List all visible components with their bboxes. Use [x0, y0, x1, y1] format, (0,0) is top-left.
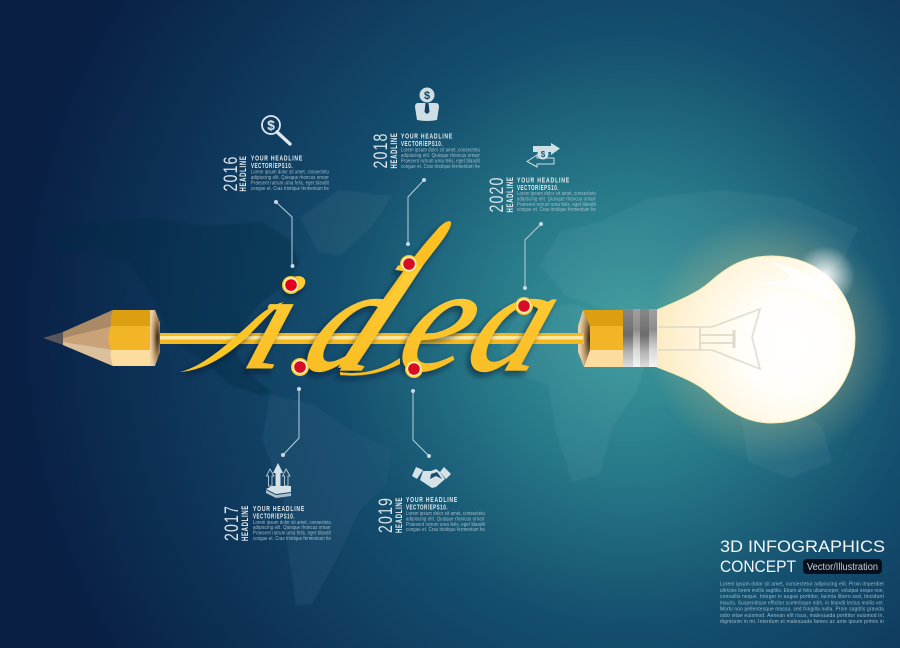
body text: adipiscing elit. Quisque rhoncus ornarr [401, 153, 480, 159]
title line 2: CONCEPT [720, 557, 796, 576]
block 2020 [487, 176, 596, 213]
icon: money with rising arrows [266, 463, 291, 498]
connector 2017 [281, 387, 301, 457]
connector 2019 [411, 389, 431, 458]
letter d: d [280, 238, 436, 403]
subhead: VECTOR/EPS10. [251, 163, 293, 170]
block 2016 [221, 154, 329, 192]
letter a: a [449, 236, 585, 403]
cut face [150, 310, 160, 366]
year: 2018 [371, 132, 392, 168]
world map [42, 190, 858, 606]
body text: Praesent rutrum urna felis, eget blandit [406, 522, 485, 528]
block 2018 [371, 132, 480, 170]
headline: YOUR HEADLINE [251, 154, 303, 162]
icon: exchange arrows with dollar [527, 143, 560, 167]
year: 2016 [221, 156, 242, 192]
body text: Praesent rutrum urna felis, eget blandit [253, 530, 331, 536]
body text: congue et. Cras tristique fermentum he [406, 527, 485, 533]
side label: HEADLINE [505, 176, 515, 212]
body text: congue et. Cras tristique fermentum he [251, 186, 329, 192]
script word idea [180, 221, 585, 403]
side label: HEADLINE [238, 156, 248, 192]
title line 1: 3D INFOGRAPHICS [720, 537, 885, 556]
body text: Praesent rutrum urna felis, eget blandit [251, 180, 329, 186]
icon: magnifier with dollar [262, 116, 290, 144]
timeline marker 1 [282, 276, 300, 294]
bulb glass [657, 256, 855, 423]
headline: YOUR HEADLINE [401, 132, 453, 140]
icon: magnifier with dollar: $ [267, 117, 275, 133]
filament [658, 309, 760, 369]
connector 2020 [523, 222, 543, 290]
light bulb [623, 246, 855, 423]
body text: adipiscing elit. Quisque rhoncus ornarr [517, 196, 596, 202]
title block [720, 537, 885, 625]
body text [251, 170, 329, 192]
subhead: VECTOR/EPS10. [401, 141, 443, 148]
wood cone [63, 310, 113, 366]
side label: HEADLINE [394, 497, 404, 533]
subhead: VECTOR/EPS10. [517, 185, 559, 192]
subhead: VECTOR/EPS10. [253, 514, 295, 520]
pencil body [111, 310, 155, 326]
body text: adipiscing elit. Quisque rhoncus ornarr [251, 175, 329, 181]
body text: Lorem ipsum dolor sit amet, consectetu [406, 511, 485, 517]
letter e: e [380, 236, 507, 403]
body text [253, 520, 331, 542]
body text: adipiscing elit. Quisque rhoncus ornarr [406, 516, 485, 522]
paragraph: convallis neque. Integer in augue porttitor, lacinia libero sed, tincidunt [720, 594, 884, 600]
lead-in flourish [180, 302, 284, 372]
icon: businessman with dollar: $ [424, 90, 430, 102]
body text: congue et. Cras tristique fermentum he [401, 164, 480, 170]
body text: congue et. Cras tristique fermentum he [253, 536, 331, 542]
body text: adipiscing elit. Quisque rhoncus ornarr [253, 525, 331, 531]
metal screw base [623, 309, 657, 367]
connector 2016 [274, 200, 294, 268]
block 2019 [376, 495, 485, 533]
body text: Lorem ipsum dolor sit amet, consectetu [401, 148, 480, 154]
headline: YOUR HEADLINE [253, 504, 305, 513]
pill badge: Vector/Illustration [807, 562, 878, 573]
timeline marker 3 [291, 358, 309, 376]
body text: congue et. Cras tristique fermentum he [517, 207, 596, 213]
bulb highlight [748, 262, 844, 314]
headline: YOUR HEADLINE [517, 176, 570, 184]
connector 2018 [406, 178, 426, 246]
icon: exchange arrows with dollar: $ [541, 150, 546, 159]
letter i: i [228, 245, 322, 398]
graphite point [43, 332, 63, 345]
body text: Praesent rutrum urna felis, eget blandit [401, 158, 480, 164]
pencil tip [43, 310, 160, 366]
year: 2020 [487, 176, 508, 212]
body text: Praesent rutrum urna felis, eget blandit [517, 202, 596, 208]
bulb glow [645, 213, 895, 463]
subhead: VECTOR/EPS10. [406, 504, 448, 512]
timeline marker 5 [515, 297, 533, 315]
pill badge [803, 559, 882, 574]
side label: HEADLINE [240, 505, 250, 541]
body text: Lorem ipsum dolor sit amet, consectetu [517, 191, 596, 197]
sparkle [795, 246, 855, 306]
paragraph: dignissim in mi. Interdum et malesuada fames ac ante ipsum primis in [720, 619, 884, 625]
body text: Lorem ipsum dolor sit amet, consectetu [251, 170, 329, 176]
year: 2019 [376, 497, 397, 533]
year: 2017 [222, 505, 243, 541]
timeline marker 4 [405, 360, 423, 378]
body text [517, 191, 596, 213]
gold connector line [155, 333, 585, 344]
body text [401, 148, 480, 170]
ascender flourish [338, 221, 451, 368]
headline: YOUR HEADLINE [406, 495, 458, 504]
side label: HEADLINE [389, 132, 399, 168]
body text [406, 511, 485, 533]
timeline marker 2 [400, 255, 418, 273]
paragraph: odio vitae euismod. Aenean elit risus, malesuada porttitor euismod in, [720, 613, 884, 619]
block 2017 [222, 504, 331, 542]
icon: businessman with dollar [415, 88, 439, 121]
body text: Lorem ipsum dolor sit amet, consectetu [253, 520, 331, 526]
pencil ferrule at bulb [560, 310, 623, 367]
icon: handshake [412, 467, 451, 488]
paragraph [720, 582, 885, 625]
